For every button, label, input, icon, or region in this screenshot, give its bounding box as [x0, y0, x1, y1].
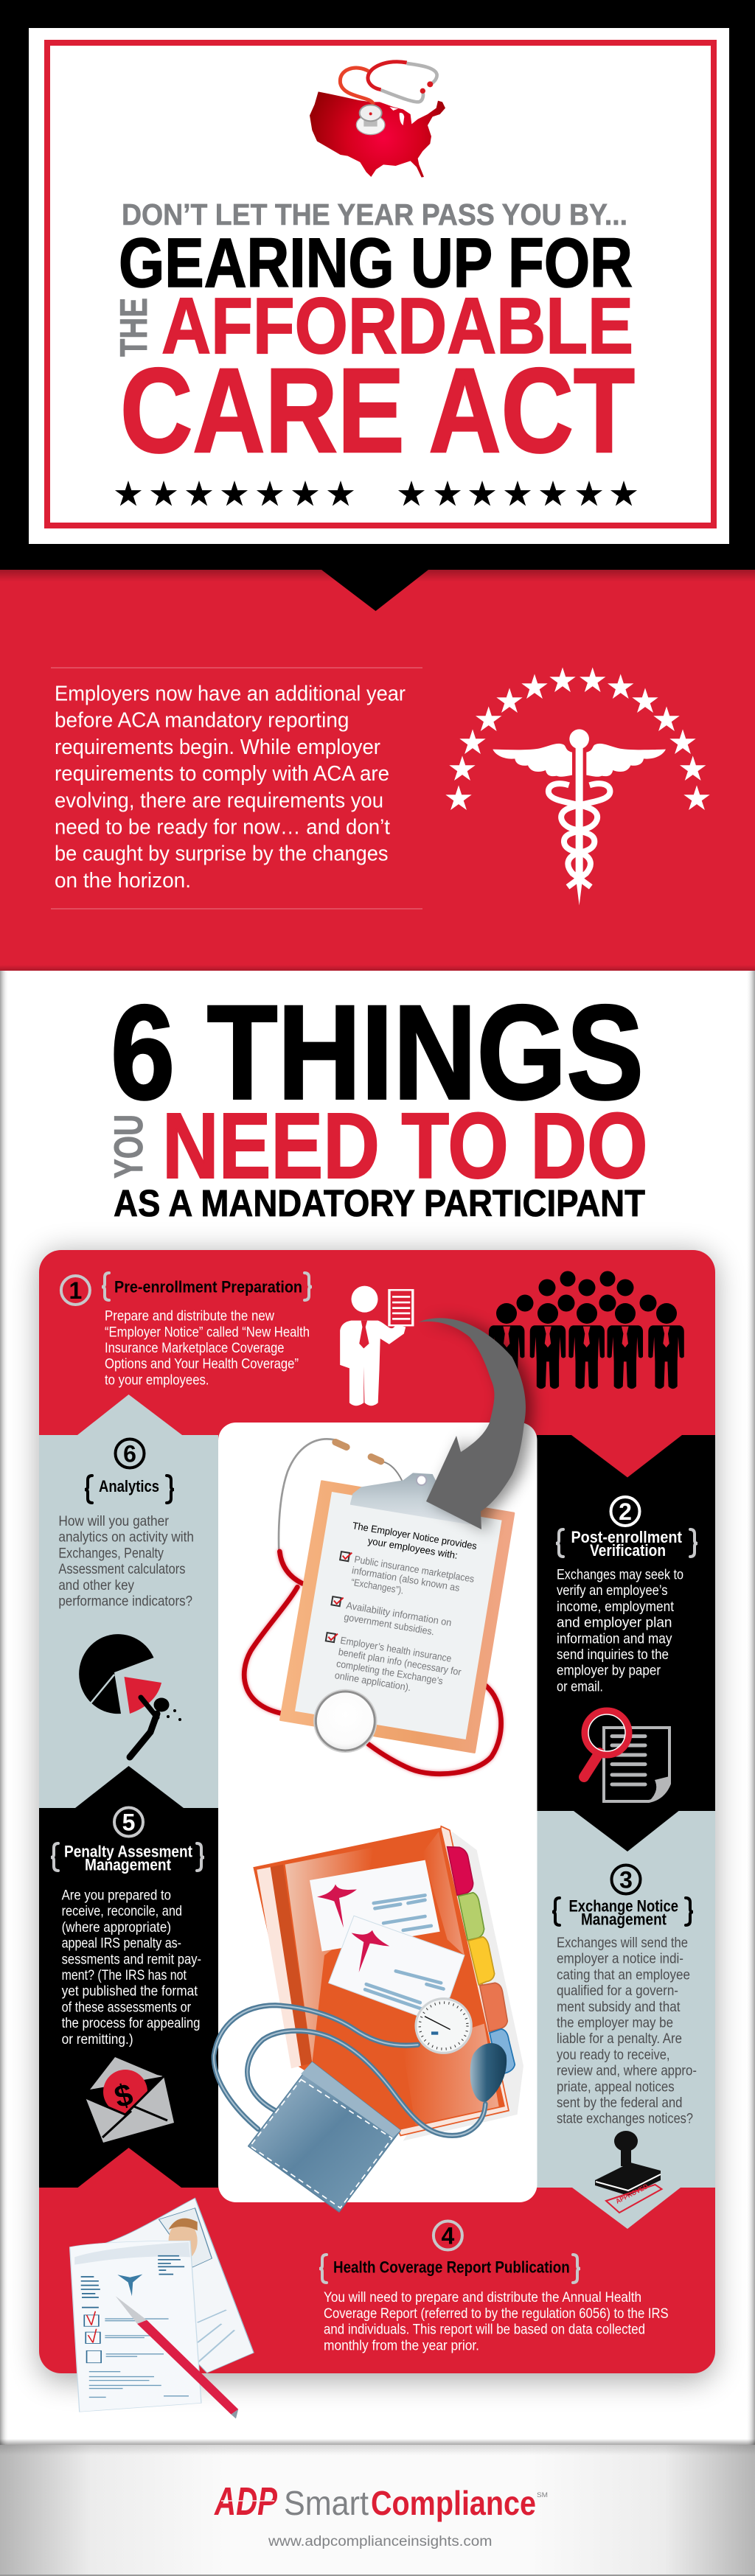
- intro text block: Employers now have an additional year: [55, 683, 406, 706]
- rotated word: you: YOU: [105, 1114, 151, 1179]
- star row: [115, 481, 637, 506]
- title line: care act: CARE ACT: [120, 343, 635, 478]
- step 3: exchange notice management: Exchanges will send the: [557, 1935, 688, 1951]
- rotated word: the: THE: [113, 298, 156, 357]
- intro text block: evolving, there are requirements you: [55, 789, 383, 812]
- number 5: 5: [122, 1809, 135, 1835]
- arrow: black header pointer: [321, 570, 428, 611]
- step 5: penalty assessment management: or remitting.): [62, 2031, 133, 2048]
- step 3: exchange notice management: qualified for a govern-: [557, 1983, 678, 1999]
- intro text block: on the horizon.: [55, 869, 191, 893]
- step 6: analytics: and other key: [58, 1577, 134, 1594]
- step 5: penalty assessment management: appeal IRS penalty as-: [62, 1936, 181, 1952]
- icon: US map with stethoscope: [310, 62, 445, 178]
- clipboard text: The Employer Notice provides: [352, 1520, 478, 1551]
- step 3: exchange notice management: priate, appeal notices: [557, 2078, 675, 2095]
- number 6: [115, 1439, 145, 1468]
- icon: approved stamp: [595, 2131, 662, 2213]
- icon: pie chart with figure: [79, 1634, 181, 1757]
- cuff: [248, 2062, 400, 2212]
- step 5: penalty assessment management: of these assessments or: [62, 1999, 191, 2015]
- step 5: penalty assessment management: (where appropriate): [62, 1919, 171, 1936]
- step 1: pre-enrollment preparation: Prepare and distribute the new: [105, 1308, 275, 1324]
- step 1: pre-enrollment preparation: to your employees.: [105, 1372, 209, 1388]
- number 3: [612, 1865, 640, 1894]
- intro text block: requirements begin. While employer: [55, 736, 380, 759]
- intro text block: before ACA mandatory reporting: [55, 709, 349, 733]
- clipboard text: online application).: [334, 1669, 412, 1693]
- clipboard text: Availability information on: [345, 1599, 453, 1628]
- clipboard text: completing the Exchange’s: [335, 1658, 444, 1686]
- step 4: health coverage report publication: [319, 2221, 669, 2353]
- icon: approved stamp: APPROVED: [614, 2182, 650, 2205]
- clipboard text: benefit plan info (necessary for: [338, 1646, 462, 1678]
- number 3: 3: [619, 1866, 633, 1893]
- step 5: penalty assessment management: [51, 1807, 204, 2143]
- step 3: exchange notice management: Management: [581, 1910, 667, 1928]
- clipboard text: [334, 1520, 478, 1693]
- panel: central illustration card: [218, 1423, 537, 2202]
- tubes: [214, 2006, 485, 2135]
- step 5: penalty assessment management: ment? (The IRS has not: [62, 1967, 187, 1983]
- step 1: pre-enrollment preparation: Insurance Marketplace Coverage: [105, 1340, 285, 1356]
- website url: www.adpcomplianceinsights.com: [268, 2534, 493, 2549]
- step 2: post-enrollment verification: information and may: [557, 1630, 672, 1647]
- clipboard text: information (also known as: [351, 1565, 461, 1594]
- number 5: [114, 1807, 143, 1837]
- clipboard text: your employees with:: [367, 1535, 459, 1561]
- step 6: analytics: performance indicators?: [58, 1594, 192, 1610]
- step 5: penalty assessment management: Management: [85, 1855, 171, 1874]
- step 5: penalty assessment management: receive, reconcile, and: [62, 1903, 182, 1919]
- step 2: post-enrollment verification: employer by paper: [557, 1663, 661, 1679]
- step 5: penalty assessment management: Are you prepared to: [62, 1887, 171, 1903]
- step 1: pre-enrollment preparation: Options and Your Health Coverage”: [105, 1356, 299, 1372]
- step 4: health coverage report publication: Coverage Report (referred to by the regulation 6056) to the IRS: [324, 2306, 669, 2322]
- step 3: exchange notice management: sent by the federal and: [557, 2095, 683, 2111]
- step 3: exchange notice management: cating that an employee: [557, 1966, 690, 1983]
- step 5: penalty assessment management: Penalty Assesment: [64, 1843, 192, 1860]
- step 5: penalty assessment management: yet published the format: [62, 1983, 198, 2000]
- step 2: post-enrollment verification: or email.: [557, 1678, 603, 1694]
- clipboard text: Employer’s health insurance: [339, 1635, 453, 1664]
- step 2: post-enrollment verification: income, employment: [557, 1599, 675, 1615]
- medical cards: [310, 1860, 440, 1951]
- step 2: post-enrollment verification: verify an employee’s: [557, 1582, 668, 1599]
- number 1: 1: [69, 1277, 82, 1304]
- number 4: 4: [442, 2223, 455, 2249]
- step 2: post-enrollment verification: Verification: [590, 1541, 666, 1560]
- number 2: [610, 1497, 640, 1526]
- panel: six steps board: [39, 1250, 715, 2373]
- step 1: pre-enrollment preparation: “Employer Notice” called “New Health: [105, 1324, 310, 1340]
- title line: affordable: AFFORDABLE: [161, 281, 633, 370]
- subtitle: DON’T LET THE YEAR PASS YOU BY...: [122, 198, 627, 231]
- icon: presenter with document: [340, 1286, 414, 1406]
- icon: magnifier on document: [584, 1711, 669, 1801]
- intro text block: be caught by surprise by the changes: [55, 842, 388, 866]
- blood pressure gauge: [416, 1999, 471, 2053]
- intro text block: need to be ready for now… and don’t: [55, 815, 390, 839]
- step 1: pre-enrollment preparation: Pre-enrollment Preparation: [114, 1278, 302, 1296]
- step 6: analytics: [58, 1439, 194, 1757]
- icon: caduceus with stars: [445, 667, 710, 905]
- step 5: penalty assessment management: sessments and remit pay-: [62, 1951, 201, 1967]
- number 4: [434, 2221, 462, 2249]
- step 6: analytics: Exchanges, Penalty: [58, 1545, 164, 1561]
- step 6: analytics: analytics on activity with: [58, 1529, 194, 1546]
- intro text block: requirements to comply with ACA are: [55, 762, 389, 786]
- clipboard text: government subsidies.: [343, 1611, 435, 1637]
- arrow: notice pointer: [418, 1318, 526, 1529]
- step 6: analytics: How will you gather: [58, 1513, 169, 1529]
- title line: gearing up for: GEARING UP FOR: [119, 224, 633, 302]
- logo: ADP SmartCompliance: SM: [537, 2491, 548, 2499]
- step 3: exchange notice management: ment subsidy and that: [557, 1999, 681, 2015]
- clipboard text: Public insurance marketplaces: [353, 1554, 476, 1585]
- panel: title card: [29, 28, 729, 544]
- step 1: pre-enrollment preparation: [61, 1273, 312, 1388]
- step 3: exchange notice management: state exchanges notices?: [557, 2111, 693, 2127]
- number 1: [61, 1276, 90, 1305]
- logo: ADP SmartCompliance: ADP: [214, 2479, 278, 2524]
- step 3: exchange notice management: employer a notice indi-: [557, 1951, 683, 1967]
- icon: checkboxes: [326, 1551, 352, 1642]
- icon: envelope with dollar: $: [111, 2076, 136, 2115]
- binder tabs: [448, 1847, 515, 2075]
- heading: need to do: NEED TO DO: [162, 1094, 647, 1198]
- logo: ADP SmartCompliance: Compliance: [371, 2484, 536, 2522]
- number 6: 6: [123, 1440, 136, 1467]
- step 3: exchange notice management: [552, 1865, 697, 2213]
- heading: 6 things: 6 THINGS: [111, 977, 644, 1128]
- step 4: health coverage report publication: You will need to prepare and distribute the Annual Health: [324, 2289, 641, 2306]
- step 2: post-enrollment verification: [556, 1497, 697, 1801]
- step 6: analytics: Assessment calculators: [58, 1561, 186, 1577]
- clipboard text: “Exchanges”).: [350, 1577, 405, 1596]
- step 6: analytics: Analytics: [99, 1477, 159, 1495]
- number 2: 2: [619, 1498, 632, 1525]
- icon: envelope with dollar: [86, 2057, 174, 2143]
- heading: as a mandatory participant: AS A MANDATORY PARTICIPANT: [114, 1182, 645, 1224]
- panel shadow: [39, 1253, 715, 2381]
- logo: ADP SmartCompliance: [214, 2479, 548, 2524]
- illustration: coverage report forms and pen: [70, 2198, 254, 2419]
- step 2: post-enrollment verification: and employer plan: [557, 1615, 672, 1631]
- step 2: post-enrollment verification: Exchanges may seek to: [557, 1567, 683, 1583]
- icon: employee crowd: [489, 1271, 684, 1389]
- step 3: exchange notice management: liable for a penalty. Are: [557, 2031, 682, 2047]
- step 4: health coverage report publication: and individuals. This report will be based on data collected: [324, 2322, 645, 2338]
- step 2: post-enrollment verification: send inquiries to the: [557, 1647, 669, 1663]
- step 3: exchange notice management: the employer may be: [557, 2015, 673, 2031]
- illustration: binder and blood pressure cuff: [214, 1826, 523, 2212]
- step 4: health coverage report publication: Health Coverage Report Publication: [333, 2258, 570, 2276]
- step 2: post-enrollment verification: Post-enrollment: [571, 1528, 682, 1546]
- step 4: health coverage report publication: monthly from the year prior.: [324, 2337, 479, 2353]
- logo: ADP SmartCompliance: Smart: [284, 2484, 369, 2522]
- step 3: exchange notice management: review and, where appro-: [557, 2063, 697, 2079]
- step 3: exchange notice management: Exchange Notice: [569, 1897, 678, 1916]
- illustration: clipboard and stethoscope: [244, 1439, 514, 1774]
- step 5: penalty assessment management: the process for appealing: [62, 2015, 200, 2031]
- step 3: exchange notice management: you ready to receive,: [557, 2047, 669, 2063]
- intro text block: [51, 668, 422, 910]
